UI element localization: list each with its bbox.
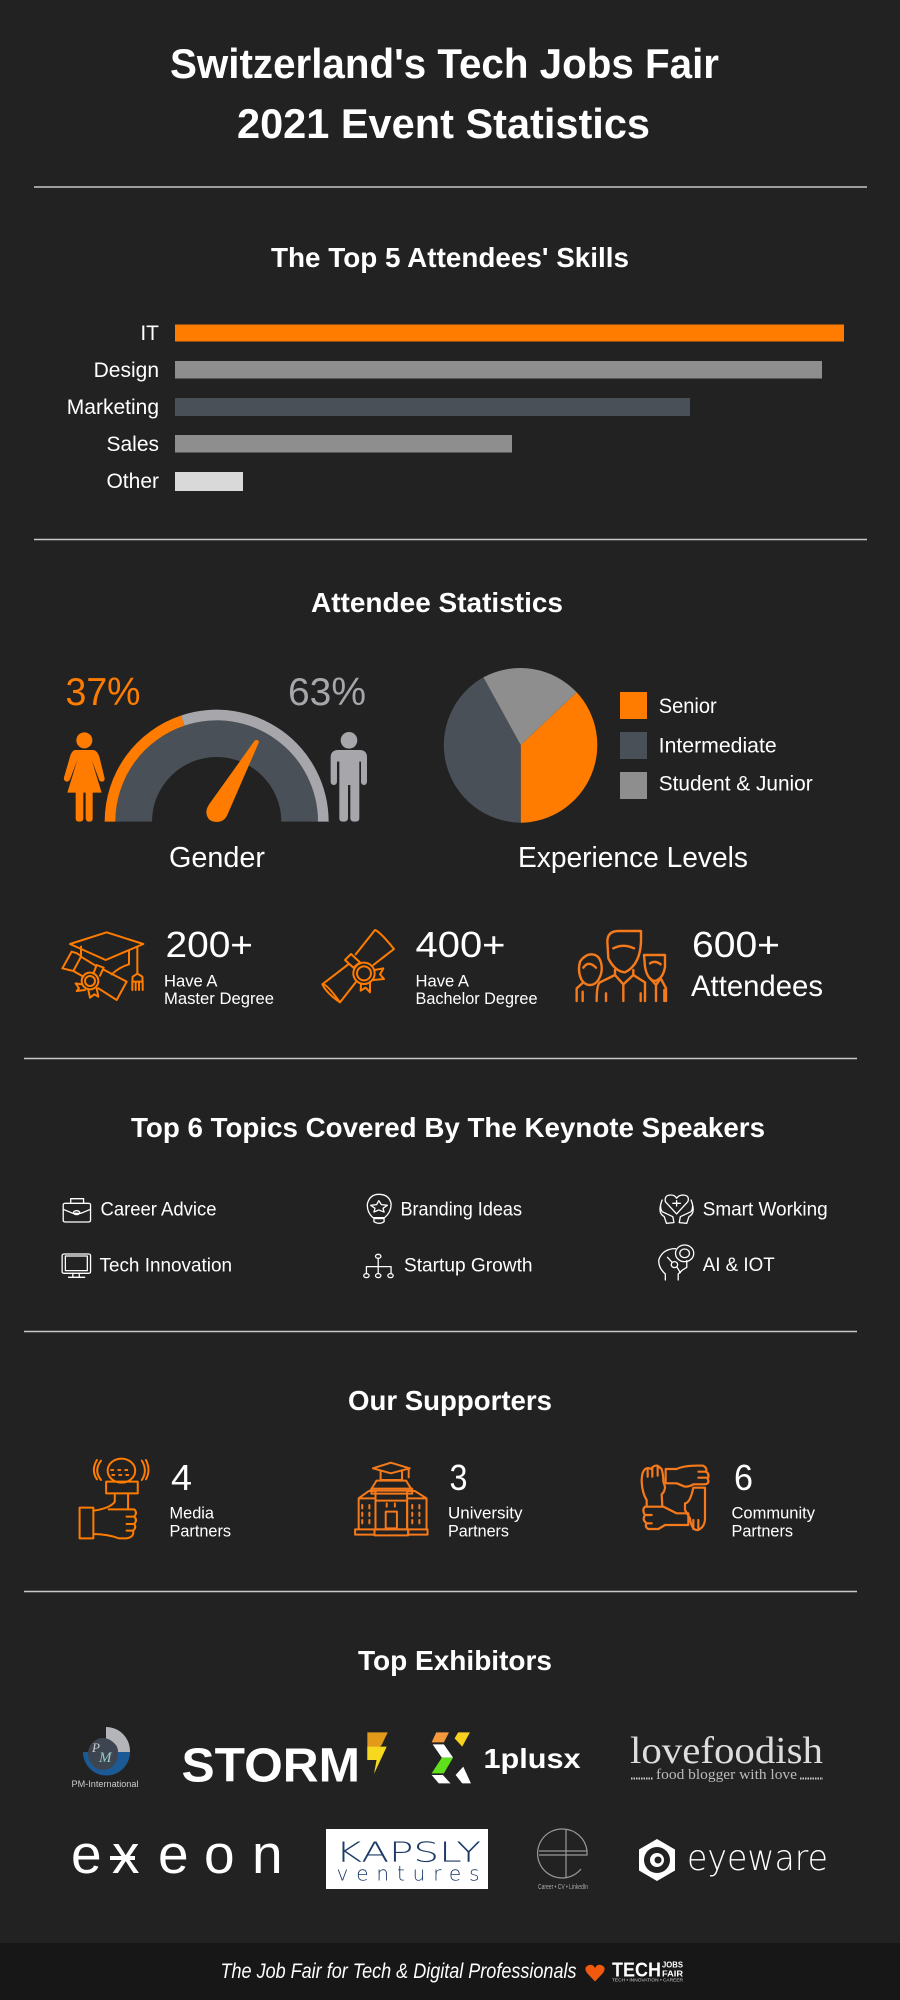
gender gauge chart — [64, 671, 367, 874]
stat: attendees: 600+ — [692, 924, 780, 965]
topic: career advice: Career Advice — [100, 1198, 216, 1220]
icon: hands holding heart — [660, 1195, 693, 1223]
supporter: media partners: 4 — [171, 1457, 192, 1498]
topic: startup growth: Startup Growth — [404, 1254, 532, 1276]
supporter: community partners: Community — [732, 1504, 815, 1522]
stat: attendees — [577, 924, 823, 1003]
icon: light bulb with star — [367, 1194, 391, 1223]
heading: skills: The Top 5 Attendees' Skills — [271, 242, 629, 273]
logo: AG career: Career • CV • LinkedIn — [538, 1884, 588, 1891]
logo: Tech Jobs Fair: TECH • INNOVATION • CAREER — [612, 1978, 684, 1982]
logo: PM-International: P — [91, 1740, 100, 1755]
logo: lovefoodish: food blogger with love — [656, 1767, 797, 1783]
stat: master degree: Master Degree — [164, 989, 274, 1008]
logo: 1plusx — [432, 1732, 581, 1783]
bar chart: skills: Other — [106, 470, 159, 493]
logo: Kapsly Ventures: KAPSLY — [336, 1836, 481, 1868]
icon: female figure — [64, 732, 105, 822]
panel: our supporters — [80, 1385, 815, 1540]
logo: PM-International: M — [98, 1750, 113, 1766]
stat: bachelor degree — [322, 924, 538, 1008]
topic: career advice — [63, 1198, 217, 1222]
stat: bachelor degree: Bachelor Degree — [416, 989, 538, 1008]
panel: keynote topics — [62, 1112, 828, 1280]
icon: computer monitor — [62, 1254, 91, 1277]
logo: Kapsly Ventures — [326, 1829, 488, 1889]
topic: tech innovation: Tech Innovation — [100, 1254, 232, 1276]
supporter: university partners — [355, 1457, 523, 1540]
supporter: community partners: 6 — [734, 1457, 753, 1498]
logo: PM-International: PM-International — [72, 1779, 138, 1789]
title: 2021 Event Statistics — [237, 100, 650, 147]
panel: top skills — [67, 242, 844, 493]
supporter: media partners — [80, 1457, 231, 1540]
title: Switzerland's Tech Jobs Fair — [170, 40, 719, 87]
supporter: university partners: University — [448, 1504, 523, 1522]
topic: branding ideas — [367, 1194, 522, 1223]
logo: Tech Jobs Fair: JOBS — [662, 1960, 684, 1970]
logo: Tech Jobs Fair: FAIR — [662, 1968, 683, 1978]
icon: group of people — [577, 931, 666, 1001]
icon: hand holding microphone — [80, 1459, 148, 1538]
logo: lovefoodish: lovefoodish — [630, 1730, 823, 1772]
logo: eyeware: eyeware — [687, 1838, 828, 1879]
supporter: university partners: Partners — [448, 1522, 509, 1540]
stat: attendees: Attendees — [691, 970, 823, 1003]
heading: attendee statistics: Attendee Statistics — [311, 587, 563, 618]
icon: head with gears — [659, 1245, 694, 1280]
footer — [0, 1943, 900, 2000]
icon: heart — [585, 1965, 605, 1982]
legend: Student & Junior — [659, 772, 813, 796]
footer: The Job Fair for Tech & Digital Professionals — [220, 1960, 577, 1983]
bar chart: skills — [67, 322, 844, 493]
supporter: community partners: Partners — [732, 1522, 793, 1540]
icon: university building — [355, 1463, 428, 1535]
gender gauge chart: 37% — [66, 671, 140, 714]
heading: supporters: Our Supporters — [348, 1385, 552, 1416]
stat: master degree — [62, 924, 274, 1008]
bar chart: skills: Design — [94, 359, 159, 382]
topic: ai and iot — [659, 1245, 775, 1280]
icon: diploma scroll — [322, 930, 394, 1002]
experience levels pie chart — [444, 668, 813, 874]
legend: Intermediate — [659, 734, 777, 758]
logo: PM-International — [72, 1727, 138, 1789]
bar chart: skills: Sales — [106, 433, 159, 456]
icon: org chart — [364, 1254, 393, 1278]
panel: top exhibitors — [71, 1645, 828, 1891]
supporter: media partners: Partners — [170, 1522, 231, 1540]
icon: four linked hands — [642, 1466, 709, 1530]
topic: smart working: Smart Working — [703, 1198, 828, 1220]
stat: master degree: 200+ — [166, 924, 253, 965]
topic: ai and iot: AI & IOT — [703, 1254, 775, 1276]
icon: male figure — [331, 732, 367, 822]
topic: branding ideas: Branding Ideas — [400, 1198, 522, 1220]
gender gauge chart: Gender — [169, 842, 265, 874]
bar chart: skills: Marketing — [67, 396, 159, 419]
logo: eyeware — [639, 1838, 828, 1881]
logo: exeon: exeon — [71, 1823, 283, 1885]
logo: STORM: STORM — [182, 1740, 360, 1792]
topic: smart working — [660, 1195, 828, 1223]
supporter: community partners — [642, 1457, 815, 1540]
logo: Tech Jobs Fair: TECH — [612, 1960, 661, 1982]
gender gauge chart: 63% — [288, 671, 366, 714]
stat: bachelor degree: Have A — [416, 972, 470, 990]
legend — [620, 692, 813, 799]
experience levels pie chart: Experience Levels — [518, 842, 748, 874]
logo: 1plusx: 1plusx — [484, 1743, 581, 1774]
icon: briefcase — [63, 1199, 91, 1222]
stat: master degree: Have A — [164, 972, 218, 990]
stat: bachelor degree: 400+ — [416, 924, 506, 965]
heading: top exhibitors: Top Exhibitors — [358, 1645, 552, 1676]
panel: attendee statistics — [62, 587, 823, 1008]
title — [170, 40, 719, 147]
heading: keynote topics: Top 6 Topics Covered By The Keynote Speakers — [131, 1112, 765, 1143]
legend: Senior — [659, 695, 717, 718]
bar chart: skills: IT — [140, 322, 159, 345]
logo: AG career — [538, 1829, 588, 1891]
supporter: university partners: 3 — [450, 1457, 468, 1498]
icon: graduation cap and diploma — [62, 932, 143, 1000]
logo: Kapsly Ventures: ventures — [336, 1862, 480, 1886]
supporter: media partners: Media — [170, 1504, 215, 1522]
